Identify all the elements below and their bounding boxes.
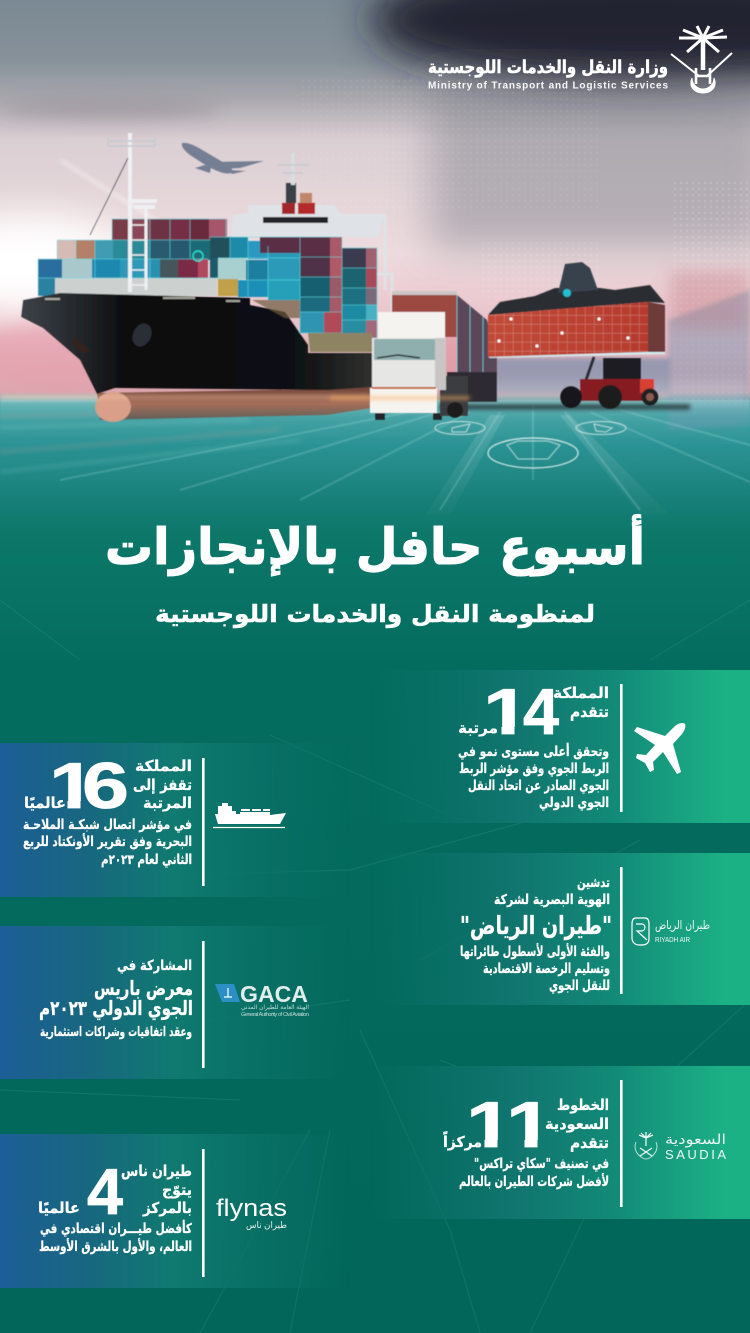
panel: maritime connectivity rank 16: المرتبة bbox=[143, 794, 192, 812]
body text: الجوي الدولي bbox=[539, 795, 609, 811]
subheading: لمنظومة النقل والخدمات اللوجستية bbox=[155, 600, 595, 628]
panel: flynas rank 4: يتوّج bbox=[162, 1181, 192, 1199]
number 14: 1 bbox=[483, 675, 530, 748]
logo: flynas: طيران ناس bbox=[246, 1221, 287, 1231]
body text bbox=[460, 943, 610, 994]
logo: Saudia: السعودية bbox=[665, 1132, 726, 1148]
heading text: الخطوط bbox=[557, 1096, 609, 1114]
number 16 bbox=[54, 762, 126, 809]
logo: Saudia: SAUDIA bbox=[665, 1147, 726, 1162]
heading text: طيران ناس bbox=[121, 1162, 192, 1180]
decorative lines bbox=[0, 600, 750, 1333]
rank label: عالميًا bbox=[38, 1199, 80, 1217]
body text: العالم، والأول بالشرق الأوسط bbox=[39, 1238, 192, 1255]
number 14: 4 bbox=[523, 675, 559, 748]
logo: GACA: الهيئة العامة للطيران المدني bbox=[241, 1004, 309, 1011]
sky and atmosphere bbox=[0, 0, 750, 430]
lifted red container bbox=[488, 262, 665, 358]
logo: GACA: GACA bbox=[240, 981, 308, 1007]
body text: للنقل الجوي bbox=[549, 978, 610, 994]
panel: air connectivity rank 14 bbox=[446, 670, 750, 823]
plane bbox=[182, 143, 264, 174]
panel: air connectivity rank 14: تتقدم bbox=[570, 703, 609, 721]
hero image: cargo ship, plane, truck and container bbox=[0, 0, 750, 515]
number 4: 4 bbox=[87, 1155, 123, 1228]
container stacks bbox=[38, 219, 377, 338]
foremast bbox=[90, 133, 157, 292]
heading text: المشاركة في bbox=[117, 958, 192, 974]
body text: الثاني لعام ٢٠٢٣م bbox=[101, 852, 192, 868]
body text: والفئة الأولى لأسطول طائراتها bbox=[460, 943, 610, 960]
body text: الربط الجوي وفق مؤشر الربط bbox=[459, 761, 609, 777]
body text bbox=[458, 743, 609, 811]
body text bbox=[39, 1220, 192, 1255]
body text: وتسليم الرخصة الاقتصادية bbox=[483, 961, 610, 977]
rank label: عالميًا bbox=[24, 794, 66, 812]
logo: flynas bbox=[216, 1195, 287, 1231]
panel: Saudia Skytrax rank 11: السعودية bbox=[545, 1115, 609, 1133]
ministry name english: Ministry of Transport and Logistic Services bbox=[428, 80, 668, 92]
number 14 bbox=[488, 688, 560, 734]
body text: كأفضل طيـــران اقتصادي في bbox=[40, 1220, 192, 1237]
ministry name arabic: وزارة النقل والخدمات اللوجستية bbox=[428, 57, 668, 78]
body text: البحرية وفق تقرير الأونكتاد للربع bbox=[23, 833, 192, 850]
number 16: 1 bbox=[49, 749, 96, 822]
number 16: 6 bbox=[82, 749, 129, 822]
road with radial lines bbox=[0, 392, 750, 515]
ship superstructure bbox=[232, 153, 392, 320]
icon: palm and swords emblem bbox=[671, 26, 732, 93]
forklift bbox=[560, 357, 658, 409]
airline name: "طيران الرياض" bbox=[460, 911, 612, 941]
panel: flynas rank 4 bbox=[0, 1134, 350, 1288]
logo: Riyadh Air bbox=[632, 918, 710, 945]
body text bbox=[23, 817, 192, 868]
panel: Saudia Skytrax rank 11: تتقدم bbox=[570, 1134, 609, 1152]
body text: لأفضل شركات الطيران بالعالم bbox=[459, 1173, 609, 1190]
event name bbox=[39, 976, 193, 1021]
body text: وعقد اتفاقيات وشراكات استثمارية bbox=[40, 1025, 192, 1040]
title bbox=[105, 514, 645, 628]
heading text: تدشين bbox=[577, 875, 610, 891]
logo: GACA: General Authority of Civil Aviation bbox=[241, 1012, 309, 1018]
body text: وتحقق أعلى مستوى نمو في bbox=[458, 743, 609, 760]
trailer container bbox=[392, 291, 497, 402]
truck bbox=[330, 312, 470, 420]
body text bbox=[459, 1156, 609, 1190]
number 11 bbox=[471, 1102, 538, 1148]
event name: معرض باريس bbox=[94, 976, 193, 1000]
logo: Riyadh Air: طيران الرياض bbox=[655, 918, 710, 933]
heading text: المملكة bbox=[553, 684, 609, 702]
rank label: مركزاً bbox=[443, 1131, 482, 1151]
event name: الجوي الدولي ٢٠٢٣م bbox=[39, 996, 193, 1021]
ship hull bbox=[0, 293, 372, 422]
logo: flynas: flynas bbox=[216, 1195, 287, 1222]
panel: maritime connectivity rank 16: تقفز إلى bbox=[133, 776, 192, 794]
logo: GACA bbox=[215, 981, 309, 1018]
panel: Riyadh Air identity bbox=[370, 853, 750, 1005]
panel: maritime connectivity rank 16 bbox=[0, 743, 286, 897]
main heading: أسبوع حافل بالإنجازات bbox=[105, 514, 645, 577]
rank label: مرتبة bbox=[458, 719, 498, 737]
icon: cargo ship bbox=[213, 803, 286, 828]
panel: Riyadh Air identity: الهوية البصرية لشركة bbox=[494, 892, 610, 908]
header logo: ministry of transport bbox=[428, 26, 732, 93]
logo: Riyadh Air: RIYADH AIR bbox=[655, 937, 690, 944]
panel: Saudia Skytrax rank 11 bbox=[430, 1066, 750, 1219]
body text: في تصنيف "سكاي تراكس" bbox=[474, 1156, 609, 1172]
number 11: 1 bbox=[466, 1088, 513, 1161]
body text: في مؤشر اتصال شبكـة الملاحـة bbox=[23, 817, 192, 833]
icon: airplane bbox=[634, 723, 685, 774]
panel: flynas rank 4: بالمركز bbox=[142, 1199, 192, 1217]
number 11: 1 bbox=[506, 1088, 553, 1161]
heading text: المملكة bbox=[135, 757, 192, 775]
panel: Paris Air Show bbox=[0, 926, 350, 1079]
body text: الجوي الصادر عن اتحاد النقل bbox=[468, 778, 609, 794]
logo: Saudia bbox=[635, 1132, 726, 1162]
